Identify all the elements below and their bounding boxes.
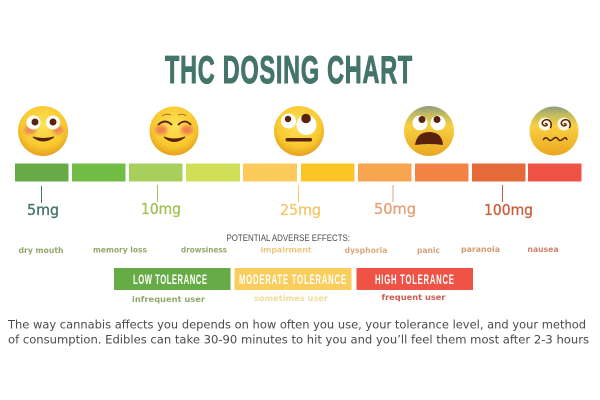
adverse effects list: memory loss (93, 246, 147, 254)
adverse effects list (18, 245, 558, 255)
adverse effects list: impairment (260, 246, 312, 254)
dose label: 50mg (374, 185, 416, 218)
explanatory text (7, 318, 589, 346)
adverse effects list: panic (417, 246, 440, 255)
moderate tolerance badge: MODERATE TOLERANCE (239, 273, 346, 288)
low tolerance badge: infrequent user (132, 295, 205, 304)
dose label: 10mg: 10mg (141, 200, 181, 218)
adverse effects list: drowsiness (181, 246, 227, 254)
dose label: 5mg (27, 186, 59, 219)
dose label: 5mg: 5mg (27, 201, 59, 219)
dose colour scale (15, 164, 582, 182)
dose label: 50mg: 50mg (374, 200, 416, 218)
high tolerance badge: frequent user (382, 293, 446, 302)
explanatory text: The way cannabis affects you depends on how often you use, your tolerance level, and your method (7, 318, 586, 332)
icon: smiling emoji (18, 106, 68, 156)
moderate tolerance badge (234, 268, 352, 303)
high tolerance badge (356, 268, 473, 302)
adverse effects list: nausea (528, 245, 558, 254)
dose label: 100mg: 100mg (484, 201, 533, 219)
icon: neutral eye-roll emoji (274, 106, 324, 156)
explanatory text: of consumption. Edibles can take 30-90 minutes to hit you and you’ll feel them most after 2-3 hours (8, 332, 589, 346)
low tolerance badge: LOW TOLERANCE (133, 273, 207, 288)
high tolerance badge: HIGH TOLERANCE (375, 273, 454, 288)
icon: scared emoji (404, 106, 454, 156)
adverse effects list: dysphoria (344, 246, 388, 255)
dose label: 25mg: 25mg (280, 201, 321, 219)
adverse effects list: paranoia (461, 245, 500, 254)
dose label: 100mg (484, 185, 533, 219)
icon: happy closed-eye emoji (150, 106, 198, 156)
low tolerance badge (114, 268, 230, 304)
dose label: 25mg (280, 185, 321, 219)
icon: dizzy emoji (530, 106, 578, 156)
adverse effects heading: POTENTIAL ADVERSE EFFECTS: (226, 233, 350, 243)
adverse effects list: dry mouth (18, 246, 64, 255)
dose label: 10mg (141, 185, 181, 218)
title: THC DOSING CHART (165, 48, 412, 91)
moderate tolerance badge: sometimes user (254, 294, 328, 303)
